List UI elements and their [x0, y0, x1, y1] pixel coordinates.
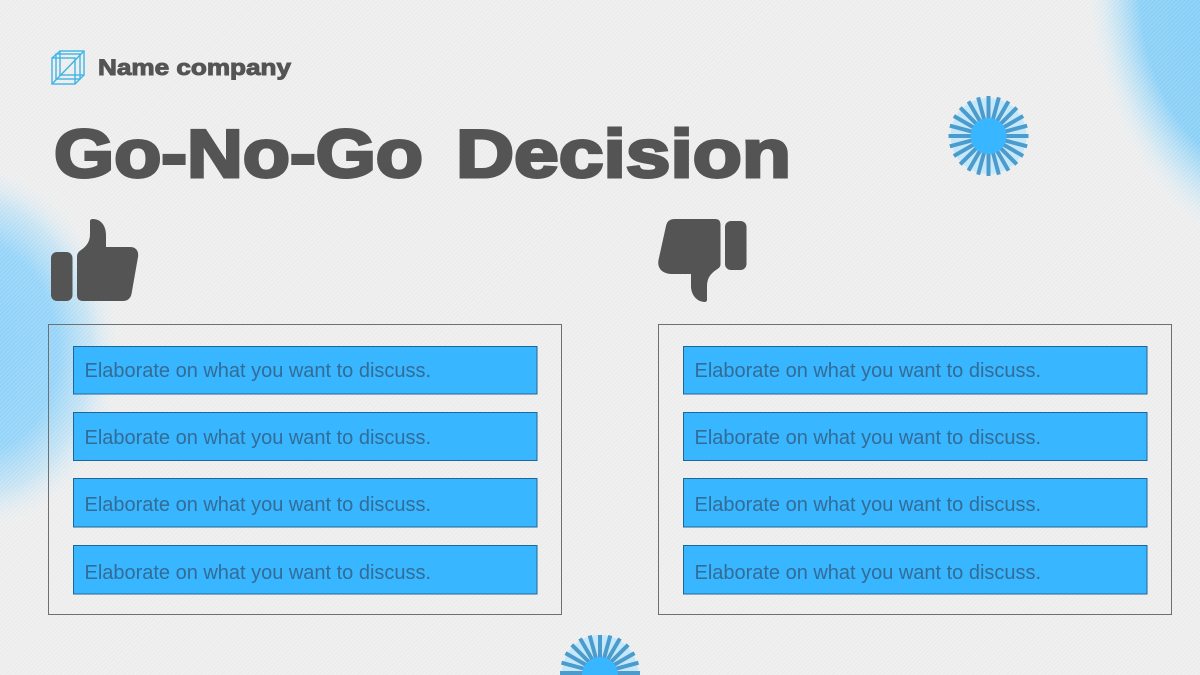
- icon: thumbs up: [51, 219, 138, 301]
- item: go 2: Elaborate on what you want to discuss.: [84, 427, 431, 449]
- item: no-go 2: [684, 412, 1147, 460]
- icon: sunburst bottom: [560, 635, 640, 675]
- title: Decision: [456, 116, 791, 192]
- item: no-go 4: [684, 546, 1147, 594]
- item: go 4: Elaborate on what you want to discuss.: [84, 562, 431, 584]
- item: go 3: Elaborate on what you want to discuss.: [84, 494, 431, 516]
- item: no-go 4: Elaborate on what you want to discuss.: [694, 562, 1041, 584]
- item: no-go 2: Elaborate on what you want to discuss.: [694, 427, 1041, 449]
- panel: no-go: [658, 324, 1172, 614]
- blue glow: top right: [1050, 0, 1200, 290]
- blue glow: left: [0, 150, 150, 550]
- item: no-go 3: Elaborate on what you want to discuss.: [694, 494, 1041, 516]
- icon: thumbs down: [658, 219, 746, 302]
- item: no-go 3: [684, 478, 1147, 527]
- panel frame: no-go: [658, 324, 1172, 614]
- panel: go: [48, 324, 562, 614]
- item: go 2: [74, 412, 537, 460]
- icon: company logo: [52, 51, 84, 84]
- item: no-go 1: [684, 346, 1147, 394]
- item: no-go 1: Elaborate on what you want to discuss.: [694, 360, 1041, 382]
- company name: Name company: [98, 55, 292, 80]
- title: Go-No-Go: [54, 116, 423, 192]
- item: go 3: [74, 478, 537, 527]
- item: go 4: [74, 546, 537, 594]
- item: go 1: [74, 346, 537, 394]
- panel frame: go: [48, 324, 562, 614]
- icon: sunburst top: [948, 96, 1028, 176]
- item: go 1: Elaborate on what you want to discuss.: [84, 360, 431, 382]
